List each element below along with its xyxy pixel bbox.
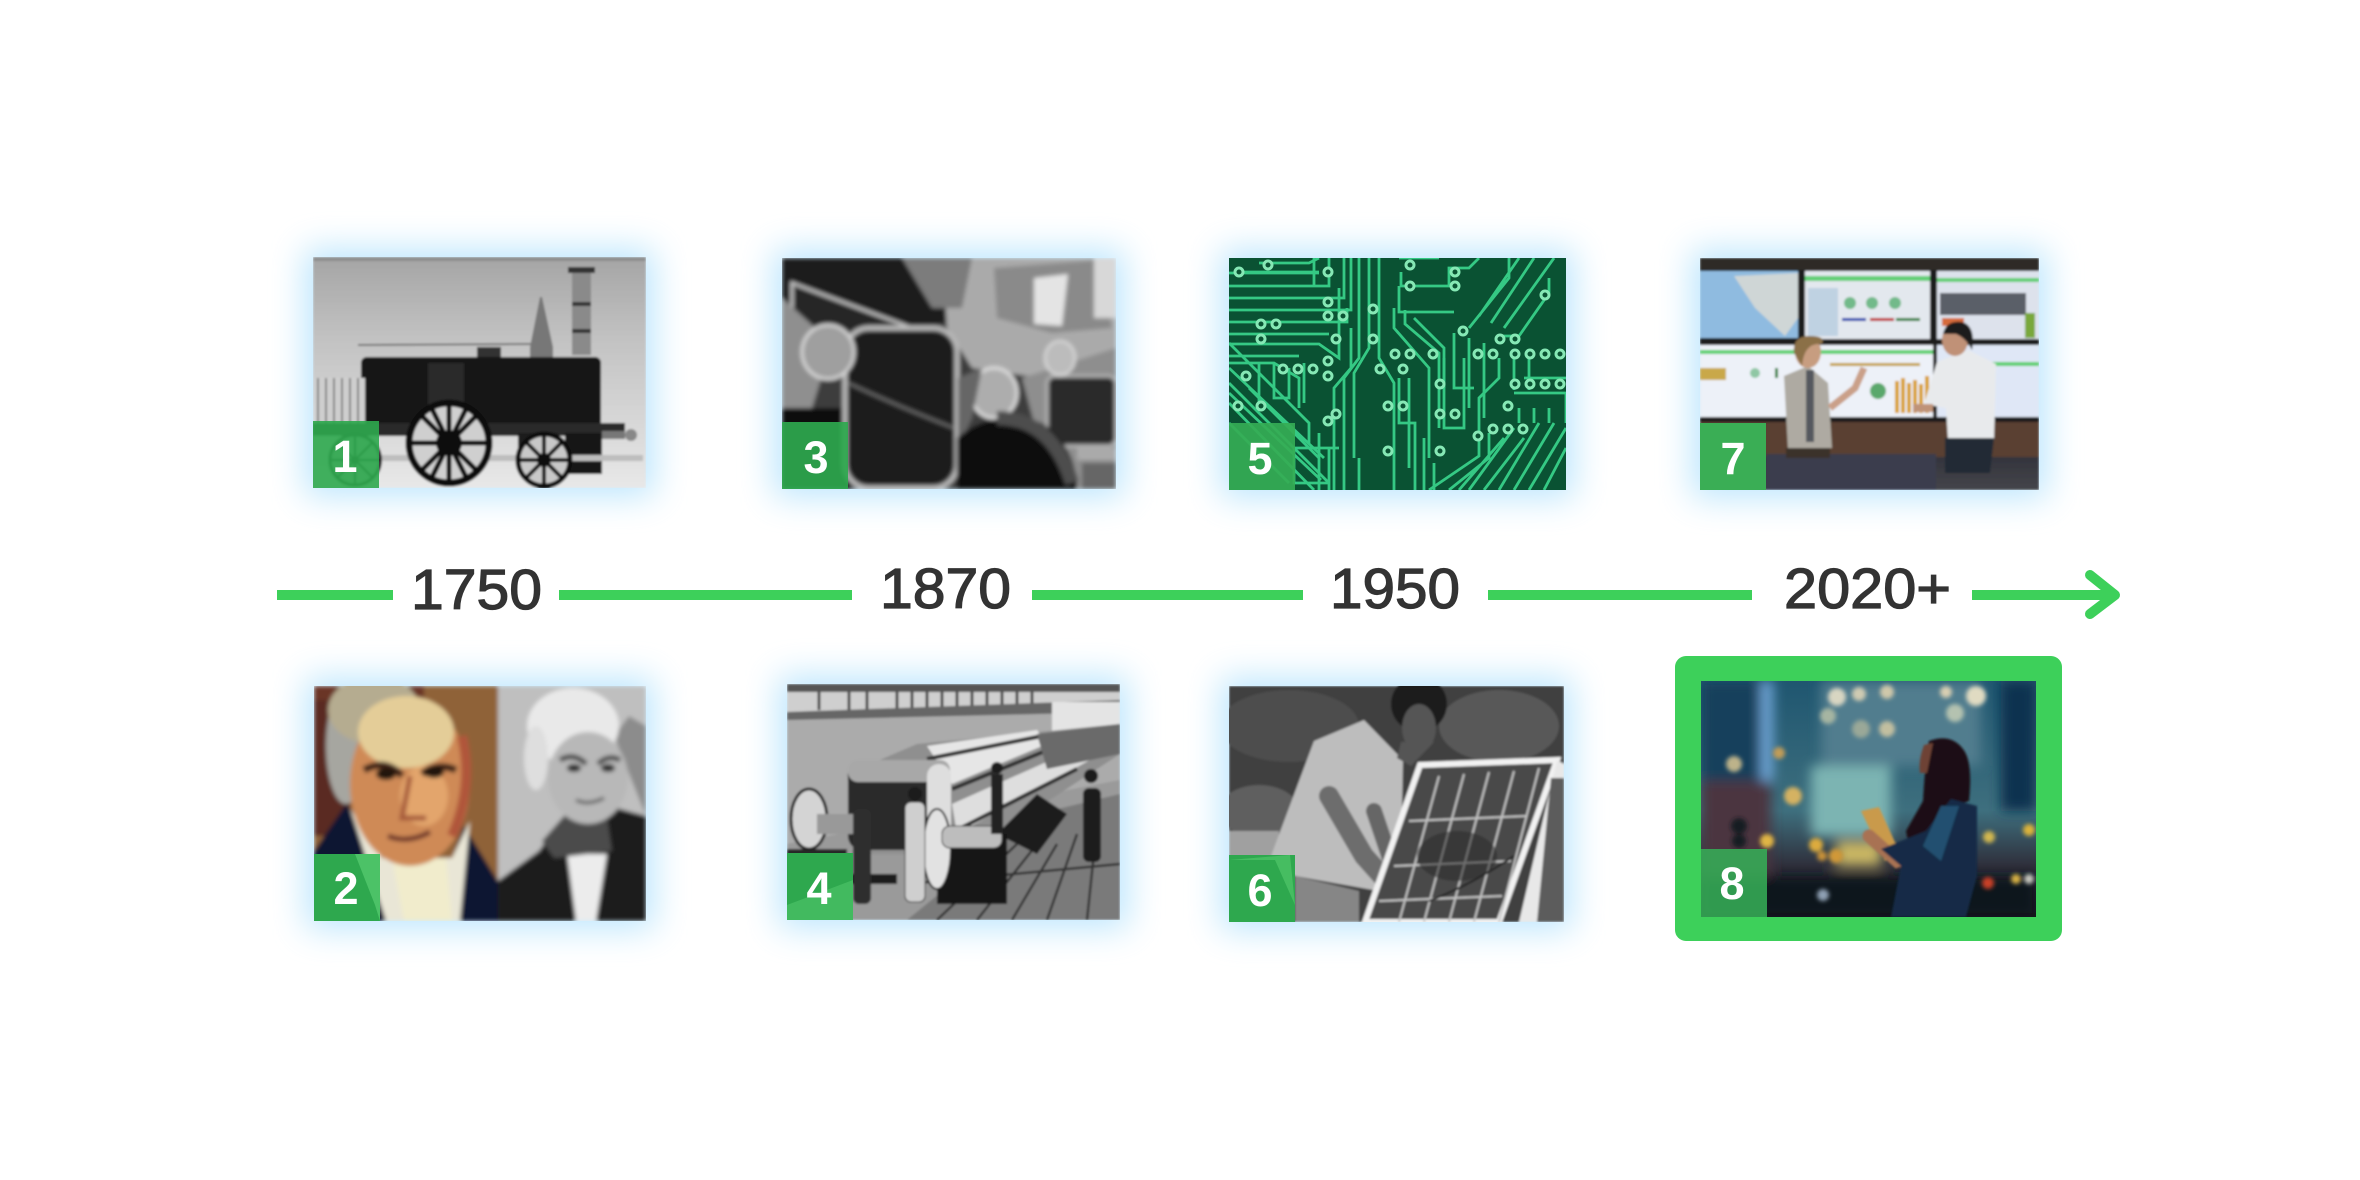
badge 8 xyxy=(1701,849,1767,917)
year label 1950: 1950 xyxy=(1330,557,1460,621)
year label 1870: 1870 xyxy=(880,557,1011,621)
year label 2020+: 2020+ xyxy=(1784,557,1951,621)
photo: circuit board traces xyxy=(1229,258,1566,490)
badge 5 xyxy=(1229,423,1295,490)
panel 1: steam locomotive xyxy=(305,249,654,496)
badge 4 xyxy=(787,853,853,920)
badge 8: 8 xyxy=(1719,858,1745,909)
badge 2 xyxy=(314,854,380,921)
photo: solar panel xyxy=(1229,686,1564,922)
panel 2: portraits of two scientists xyxy=(306,676,654,929)
badge 3: 3 xyxy=(803,432,829,483)
panel 6: person installing a solar panel xyxy=(1219,676,1572,930)
badge 1 xyxy=(313,421,379,488)
badge 7: 7 xyxy=(1720,433,1746,484)
badge 5: 5 xyxy=(1247,433,1273,484)
photo: factory hall xyxy=(787,684,1120,920)
panel 4: engraving of an industrial generator hall xyxy=(779,676,1128,928)
arrowhead xyxy=(2090,575,2115,614)
photo: night city xyxy=(1701,681,2036,917)
panel 8: highlighted woman with tablet in a night city xyxy=(1675,656,2062,941)
green frame xyxy=(1675,656,2062,941)
badge 3 xyxy=(782,422,848,489)
badge 1: 1 xyxy=(332,431,358,482)
badge 7 xyxy=(1700,423,1766,490)
year label 1750: 1750 xyxy=(411,558,542,622)
timeline arrow xyxy=(277,575,2115,614)
photo: locomotive xyxy=(313,257,646,488)
panel 3: vintage cars xyxy=(774,250,1124,497)
photo: portraits xyxy=(314,686,646,921)
panel 7: control room with two people xyxy=(1692,250,2047,498)
badge 2: 2 xyxy=(333,863,359,914)
badge 4: 4 xyxy=(806,863,832,914)
badge 6 xyxy=(1229,855,1295,922)
photo: cars xyxy=(782,258,1116,489)
badge 6: 6 xyxy=(1247,865,1273,916)
photo: control room xyxy=(1700,258,2039,490)
panel 5: circuit board xyxy=(1221,250,1574,498)
